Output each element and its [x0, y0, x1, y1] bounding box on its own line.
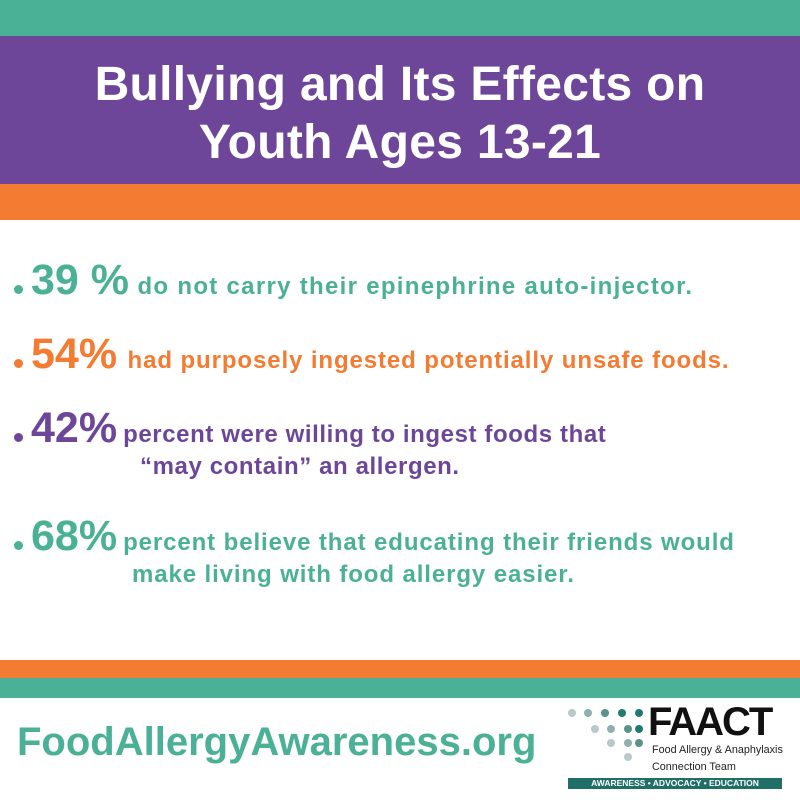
stat 2: 54% had purposely ingested potentially unsafe foods. [31, 330, 729, 378]
website: FoodAllergyAwareness.org [17, 720, 536, 764]
icon: dot grid [568, 709, 643, 761]
logo wordmark: FAACT [648, 700, 771, 744]
bottom orange band [0, 660, 800, 678]
bottom teal band [0, 678, 800, 698]
orange band [0, 184, 800, 220]
stat 1: 39 % do not carry their epinephrine auto-injector. [31, 256, 693, 304]
title: Bullying and Its Effects on [95, 58, 705, 111]
stat 3: 42%percent were willing to ingest foods that [31, 404, 606, 452]
stat 4: make living with food allergy easier. [132, 561, 575, 588]
title: Youth Ages 13-21 [199, 116, 601, 169]
stat 4: 68%percent believe that educating their friends would [31, 512, 735, 560]
stat 4 [14, 512, 735, 588]
logo: FAACT: Food Allergy & Anaphylaxis [652, 744, 783, 756]
logo: FAACT [568, 700, 783, 789]
top teal band [0, 0, 800, 36]
logo: FAACT: Connection Team [652, 761, 736, 773]
title [95, 58, 705, 169]
stat 3 [14, 404, 606, 480]
tagline bar: AWARENESS • ADVOCACY • EDUCATION [591, 778, 759, 788]
title banner [0, 36, 800, 184]
stat 3: “may contain” an allergen. [140, 453, 460, 480]
